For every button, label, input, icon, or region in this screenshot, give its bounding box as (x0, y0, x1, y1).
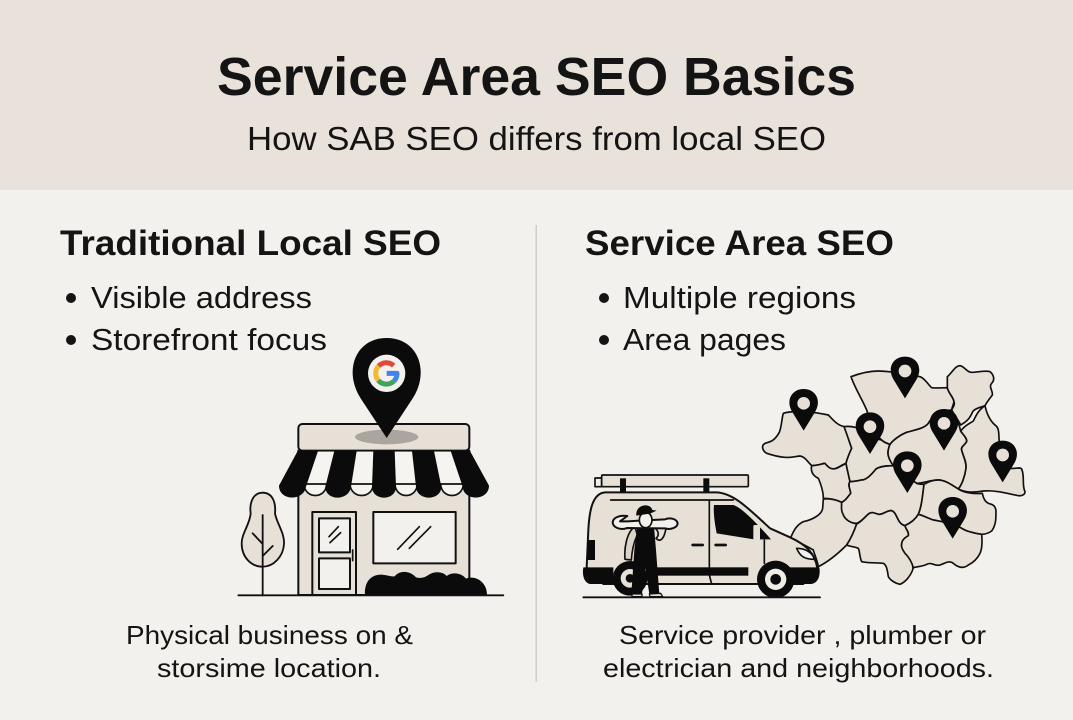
pin: central west (856, 412, 884, 454)
caption: service area: Service provider , plumber or (619, 620, 986, 650)
bullet list: service area: Multiple regions (623, 280, 856, 315)
header band (0, 0, 1073, 190)
icon: shop window (373, 512, 456, 563)
icon: technician with wrench (613, 505, 678, 597)
illustration: storefront with map pin (238, 338, 503, 595)
bullet list: traditional (66, 280, 327, 357)
caption: service area (603, 620, 994, 683)
heading: traditional local SEO: Traditional Local SEO (60, 224, 441, 263)
illustration: service van with technician (583, 475, 820, 598)
caption: service area: electrician and neighborhoods. (603, 653, 994, 683)
bullet list: service area: Area pages (623, 322, 786, 357)
bullet list: service area (599, 280, 856, 357)
panel: service area SEO (583, 224, 1025, 683)
subtitle: How SAB SEO differs from local SEO (247, 120, 826, 157)
icon: rear wheel (613, 561, 647, 596)
bullet list: traditional: Visible address (91, 280, 312, 315)
pin: north (891, 357, 919, 398)
icon: google map pin (353, 338, 421, 438)
icon: van body (583, 492, 820, 584)
icon: awning (279, 451, 489, 498)
caption: traditional: Physical business on & (126, 620, 413, 650)
pin: center (893, 451, 922, 493)
icon: tree (242, 493, 284, 595)
map regions (763, 366, 1025, 584)
bullet list: traditional: Storefront focus (91, 322, 327, 357)
caption: traditional: storsime location. (157, 653, 381, 683)
icon: front wheel (757, 561, 794, 598)
pin: east (988, 441, 1017, 482)
panel: traditional local SEO (60, 224, 503, 683)
icon: bushes (365, 572, 487, 595)
pin: central east (930, 409, 958, 451)
icon: door (312, 512, 356, 595)
map of service regions with pins (763, 357, 1025, 584)
icon: roof ladder (595, 475, 748, 492)
heading: service area SEO: Service Area SEO (585, 224, 894, 263)
caption: traditional (126, 620, 413, 683)
title: Service Area SEO Basics (217, 47, 856, 107)
pin: south east (938, 497, 967, 539)
pin: west (789, 389, 818, 431)
